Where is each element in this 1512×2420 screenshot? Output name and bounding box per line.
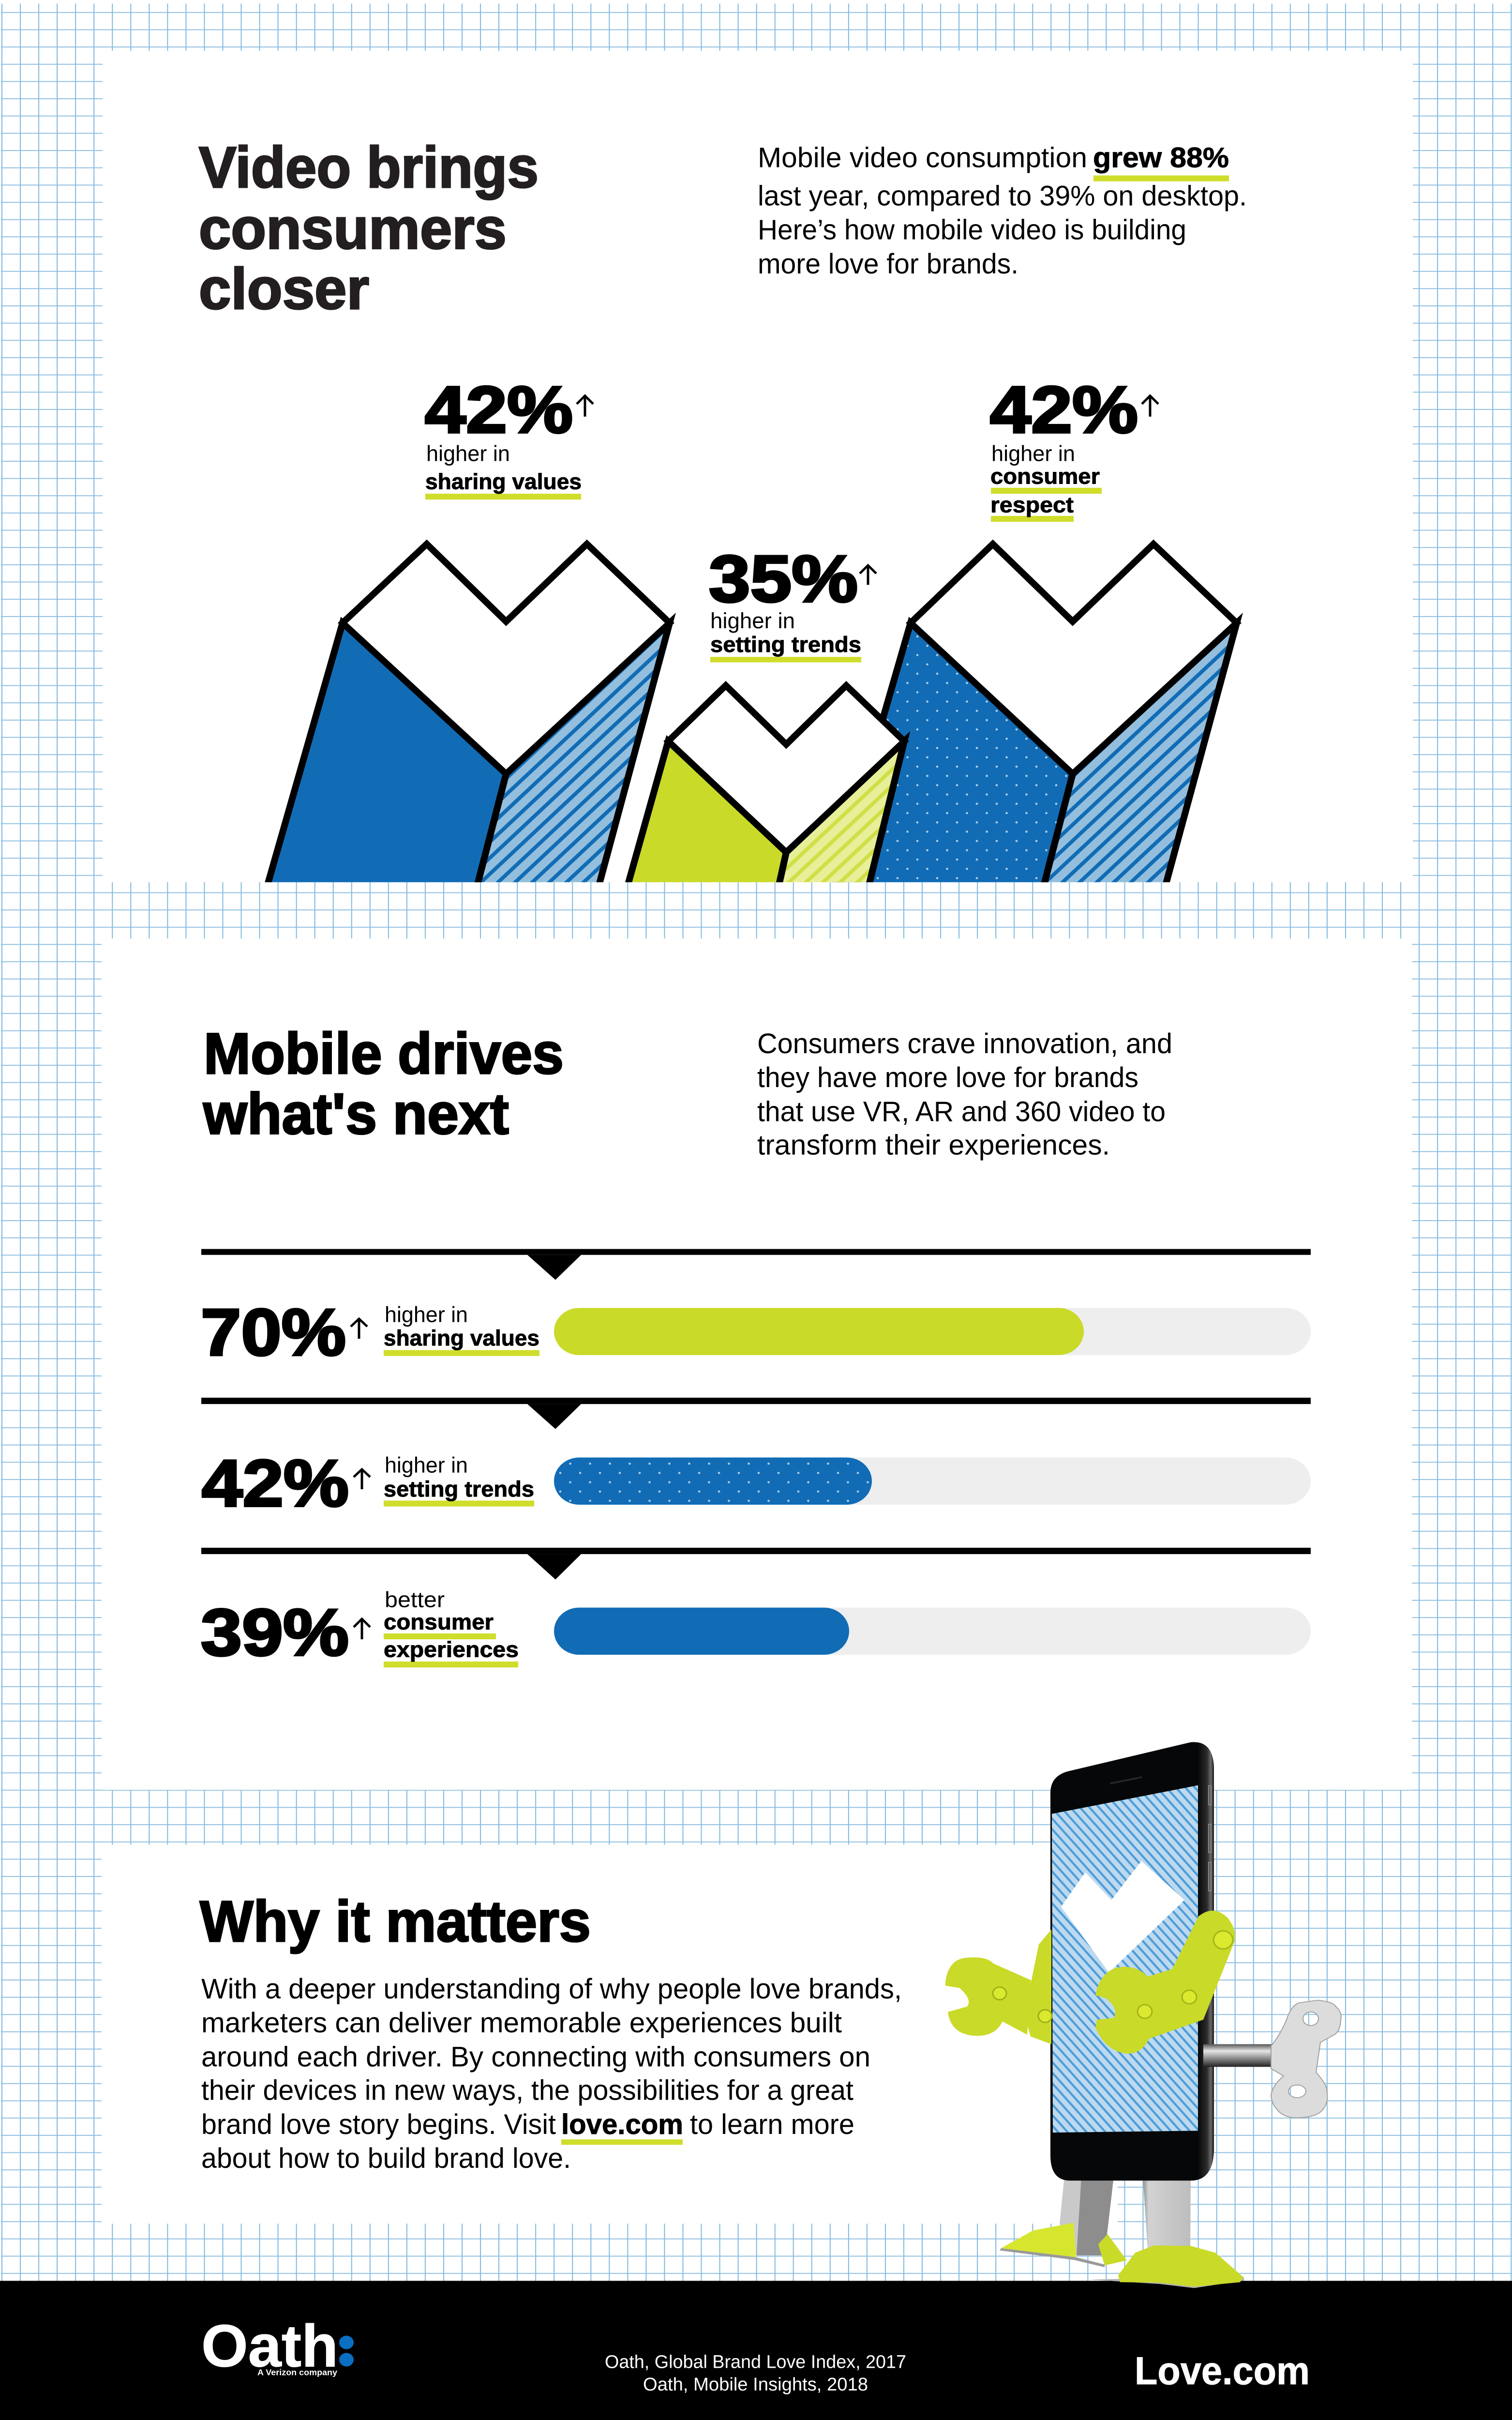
heading: mobile drives what's next: Mobile drives [204, 1022, 564, 1086]
text block: consumers crave innovation: that use VR, AR and 360 video to [757, 1096, 1166, 1127]
row: 39% better consumer experiences [201, 1548, 1311, 1669]
sources: Oath, Global Brand Love Index, 2017 [605, 2351, 906, 2372]
row: 42% higher in setting trends: setting trends [384, 1477, 534, 1501]
text block: mobile video consumption intro [758, 142, 1247, 279]
row: 42% higher in setting trends [201, 1398, 1311, 1520]
button strokes [1209, 1786, 1211, 1891]
heading: video brings consumers closer: Video brings [199, 136, 539, 200]
stat: 42% higher in sharing values: sharing values [425, 469, 582, 494]
stat: 35% higher in setting trends: setting trends [710, 632, 861, 657]
foot: left [1000, 2223, 1127, 2267]
panel: mobile drives what's next [102, 938, 1412, 1790]
row: 39% better consumer experiences: 39% [201, 1595, 349, 1669]
heart column: sharing values [261, 544, 670, 907]
row: 39% better consumer experiences: consumer [384, 1610, 494, 1634]
text block: consumers crave innovation: they have more love for brands [757, 1062, 1138, 1093]
foot: right [1089, 2245, 1244, 2288]
footer band [0, 2281, 1512, 2420]
row: 39% better consumer experiences: experiences [384, 1637, 519, 1662]
panel: video brings consumers closer [103, 51, 1413, 907]
logo: Oath: Oath [201, 2313, 338, 2380]
text block: mobile video consumption intro: last year, compared to 39% on desktop. [758, 180, 1247, 212]
stat: 42% higher in consumer respect: 42% [990, 373, 1138, 447]
text block: mobile video consumption intro: grew 88% [1093, 142, 1229, 173]
row: 39% better consumer experiences: better [385, 1588, 445, 1612]
sources: Oath, Mobile Insights, 2018 [643, 2374, 868, 2395]
phone [1050, 1741, 1214, 2183]
stat: 42% higher in consumer respect: respect [990, 493, 1074, 517]
heading: video brings consumers closer: consumers [199, 197, 507, 261]
row: 70% higher in sharing values: higher in [385, 1302, 468, 1327]
arm: left wrench [945, 1930, 1052, 2044]
heart column: setting trends [622, 685, 904, 907]
stat: 42% higher in consumer respect: higher in [991, 441, 1075, 466]
stat: 42% higher in sharing values: 42% [425, 373, 573, 447]
text block: why it matters body: around each driver. By connecting with consumers on [201, 2041, 870, 2072]
text block: why it matters body: marketers can deliver memorable experiences built [201, 2007, 842, 2039]
row: 42% higher in setting trends: higher in [385, 1453, 468, 1477]
stat: 35% higher in setting trends [709, 542, 876, 662]
stat: 42% higher in consumer respect [990, 373, 1158, 522]
text block: consumers crave innovation: Consumers crave innovation, and [757, 1028, 1172, 1059]
wind-up key [1203, 2000, 1341, 2118]
leg: left [1060, 2176, 1114, 2255]
link: Love.com: Love.com [1135, 2349, 1310, 2392]
stat: 35% higher in setting trends: higher in [710, 609, 795, 633]
text block: mobile video consumption intro: Mobile video consumption [758, 142, 1087, 173]
row: 70% higher in sharing values: 70% [201, 1295, 346, 1369]
row: 70% higher in sharing values: sharing values [384, 1326, 539, 1350]
stat: 42% higher in consumer respect: consumer [990, 464, 1100, 488]
text block: why it matters body: love.com [561, 2109, 683, 2140]
heading: why it matters: Why it matters [200, 1890, 591, 1954]
text block: consumers crave innovation: transform their experiences. [757, 1130, 1110, 1161]
text block: why it matters body: brand love story begins. Visit [201, 2109, 556, 2140]
text block: why it matters body: With a deeper understanding of why people love brands, [201, 1973, 902, 2004]
row: 42% higher in setting trends: 42% [202, 1446, 349, 1520]
heading: video brings consumers closer [199, 136, 539, 321]
stat: 35% higher in setting trends: 35% [709, 542, 858, 616]
sources [605, 2351, 906, 2395]
illustration: wind-up phone robot [945, 1741, 1341, 2288]
text block: mobile video consumption intro: Here’s how mobile video is building [758, 214, 1186, 245]
heart on screen [1061, 1861, 1184, 1972]
heading: mobile drives what's next: what's next [203, 1082, 509, 1147]
panel: why it matters [102, 1845, 1118, 2223]
stat: 42% higher in sharing values [425, 373, 593, 499]
text block: consumers crave innovation [757, 1028, 1172, 1161]
heading: video brings consumers closer: closer [199, 257, 369, 321]
text block: why it matters body: to learn more [690, 2109, 854, 2140]
phone screen [1052, 1785, 1198, 2133]
heading: mobile drives what's next [203, 1022, 564, 1147]
text block: why it matters body [201, 1973, 902, 2174]
chart: heart columns [261, 544, 1237, 907]
heart column: consumer respect [828, 544, 1237, 907]
leg: right [1143, 2176, 1191, 2249]
text block: why it matters body: about how to build brand love. [201, 2143, 571, 2174]
text block: why it matters body: their devices in new ways, the possibilities for a great [201, 2074, 853, 2106]
text block: mobile video consumption intro: more love for brands. [758, 248, 1018, 279]
arm: right wrench [1095, 1911, 1235, 2054]
stat: 42% higher in sharing values: higher in [426, 441, 510, 466]
logo: Oath: A Verizon company [257, 2367, 338, 2377]
row: 70% higher in sharing values [201, 1249, 1311, 1369]
